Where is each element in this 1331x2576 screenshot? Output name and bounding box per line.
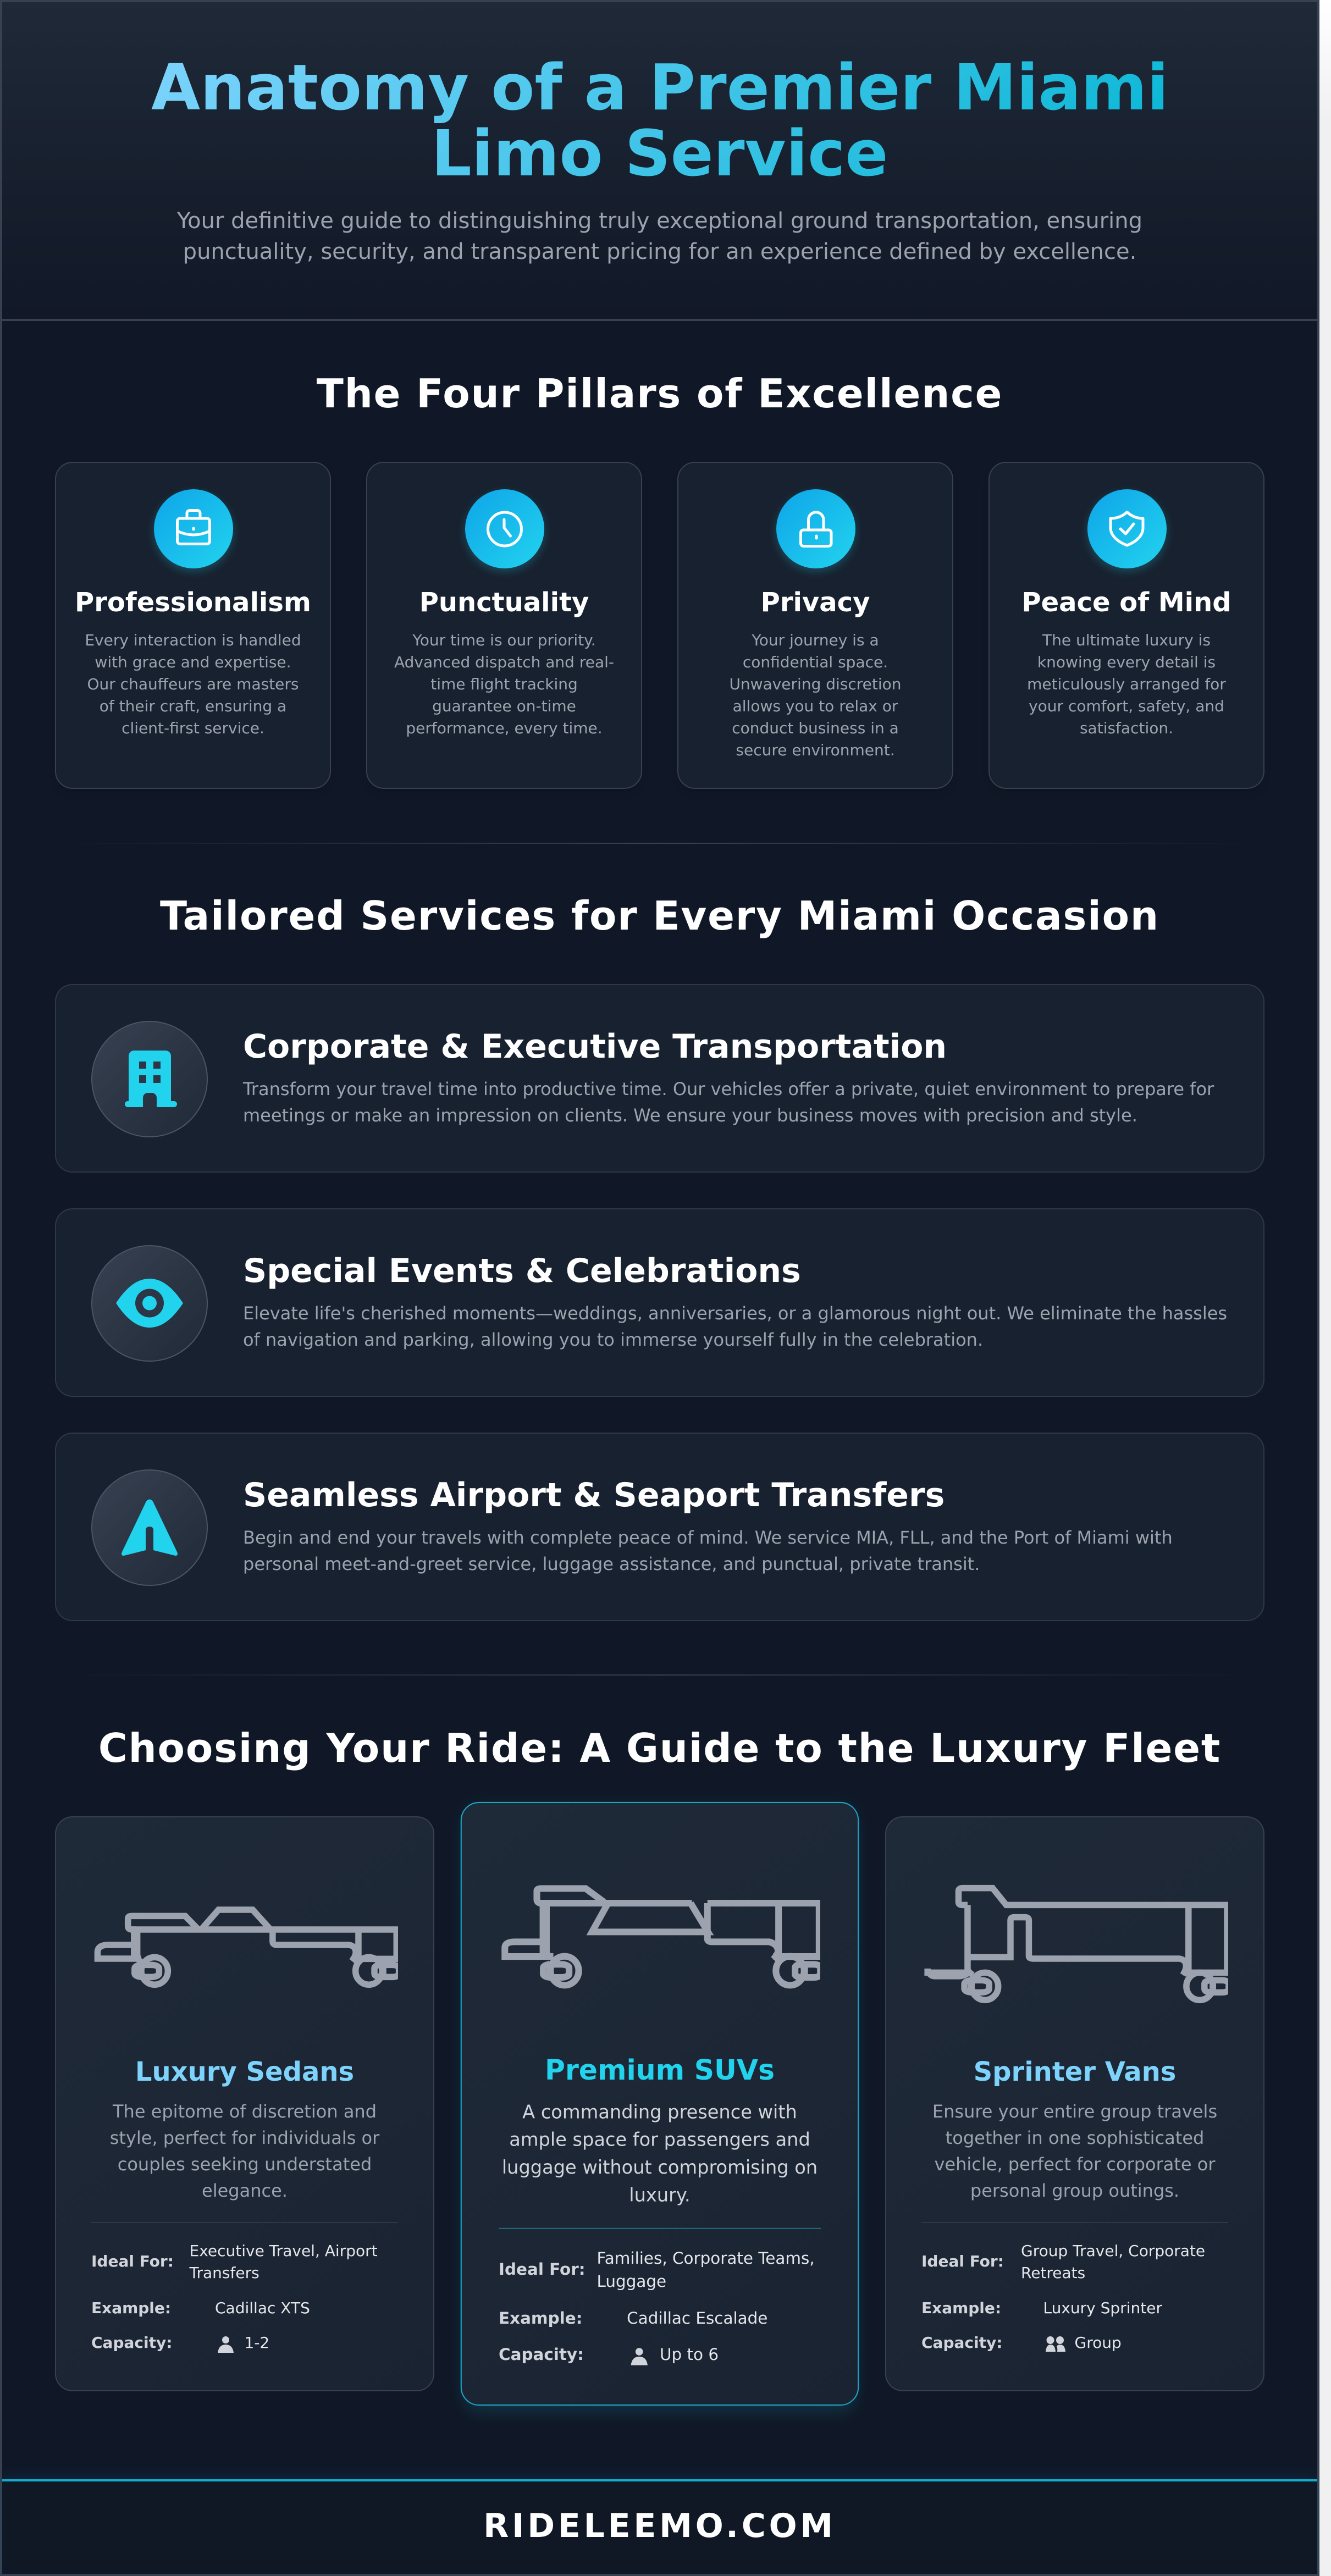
pillar title: Privacy (761, 587, 870, 618)
icon: briefcase (154, 489, 233, 568)
fleet text: luxury. (629, 2184, 691, 2206)
brand website: RIDELEEMO.COM (483, 2507, 836, 2545)
spec value: capacity: 1-2 (244, 2333, 269, 2352)
service title: Seamless Airport & Seaport Transfers (243, 1476, 945, 1514)
header (2, 2, 1317, 321)
spec label: capacity: Capacity: (499, 2345, 584, 2364)
pillar text: Your time is our priority. (412, 631, 596, 649)
panel: professionalism (55, 462, 331, 789)
icon: clock (465, 489, 544, 568)
panel: premium SUVs (461, 1802, 859, 2406)
subtitle: Your definitive guide to distinguishing truly exceptional ground transportation, ensuring (177, 208, 1142, 234)
pillar text (1027, 631, 1226, 737)
pillar text: Unwavering discretion (729, 675, 902, 693)
icon: person (218, 2336, 234, 2353)
pillar text: guarantee on-time (432, 697, 576, 715)
icon: group of people (1046, 2336, 1065, 2352)
pillar title: Peace of Mind (1021, 587, 1231, 618)
fleet text: vehicle, perfect for corporate or (934, 2154, 1216, 2175)
spec label: ideal for: Ideal For: (921, 2252, 1004, 2270)
fleet text: together in one sophisticated (946, 2127, 1204, 2148)
service text: personal meet-and-greet service, luggage assistance, and punctual, private transit. (243, 1554, 980, 1574)
service title: Corporate & Executive Transportation (243, 1027, 947, 1066)
pillar text: conduct business in a (732, 719, 899, 737)
pillar text: time flight tracking (430, 675, 578, 693)
fleet title: Luxury Sedans (135, 2057, 354, 2087)
icon: eye (91, 1245, 208, 1361)
spec value: ideal for: Retreats (1021, 2264, 1085, 2282)
fleet title: Premium SUVs (545, 2054, 775, 2086)
icon: navigation arrow (91, 1469, 208, 1585)
pillar text (85, 631, 301, 737)
panel: corporate service (55, 984, 1264, 1173)
service title: Special Events & Celebrations (243, 1252, 801, 1290)
pillar text: allows you to relax or (733, 697, 898, 715)
pillar text (394, 631, 614, 737)
pillar text: confidential space. (743, 653, 888, 671)
pillar text (729, 631, 902, 759)
spec label: capacity: Capacity: (91, 2333, 172, 2352)
service text: meetings or make an impression on clients. We ensure your business moves with precision and style. (243, 1105, 1137, 1126)
pillar text: of their craft, ensuring a (100, 697, 286, 715)
spec value: capacity: Up to 6 (660, 2345, 719, 2364)
pillar title: Professionalism (75, 587, 311, 618)
pillar text: Your journey is a (752, 631, 879, 649)
spec label: ideal for: Ideal For: (499, 2259, 585, 2279)
footer (2, 2479, 1317, 2574)
service text: of navigation and parking, allowing you to immerse yourself fully in the celebration. (243, 1329, 983, 1350)
heading: four pillars: The Four Pillars of Excellence (317, 371, 1003, 417)
pillar text: meticulously arranged for (1027, 675, 1226, 693)
fleet text: luggage without compromising on (502, 2156, 818, 2178)
pillar text: Every interaction is handled (85, 631, 301, 649)
spec value: ideal for (189, 2242, 378, 2282)
vehicle: sedan outline (95, 1906, 398, 1988)
fleet text: couples seeking understated (118, 2154, 372, 2175)
fleet text (110, 2101, 379, 2201)
spec value: example: Luxury Sprinter (1043, 2299, 1162, 2317)
panel: airport service (55, 1433, 1264, 1621)
heading: fleet: Choosing Your Ride: A Guide to the Luxury Fleet (98, 1725, 1221, 1771)
fleet text: A commanding presence with (522, 2101, 797, 2123)
service text: Elevate life's cherished moments—weddings, anniversaries, or a glamorous night out. We eliminate the hassles (243, 1303, 1227, 1324)
panel: special events service (55, 1208, 1264, 1397)
spec label: ideal for: Ideal For: (91, 2252, 174, 2270)
fleet text: style, perfect for individuals or (110, 2127, 379, 2148)
panel: privacy (677, 462, 953, 789)
fleet text (502, 2101, 818, 2206)
icon: person (631, 2348, 648, 2365)
spec value: example: Cadillac XTS (215, 2299, 310, 2317)
pillar text: The ultimate luxury is (1042, 631, 1211, 649)
title: Limo Service (431, 117, 888, 191)
spec label: example: Example: (91, 2299, 171, 2317)
icon: padlock (776, 489, 855, 568)
spec label: example: Example: (921, 2299, 1001, 2317)
spec value: capacity: Group (1074, 2333, 1122, 2352)
pillar text: satisfaction. (1080, 719, 1173, 737)
pillar title: Punctuality (419, 587, 589, 618)
fleet text: Ensure your entire group travels (932, 2101, 1217, 2122)
fleet text: elegance. (202, 2180, 288, 2201)
fleet text: ample space for passengers and (509, 2129, 810, 2151)
subtitle: punctuality, security, and transparent pricing for an experience defined by excellence. (183, 239, 1136, 264)
spec value: ideal for: Families, Corporate Teams, (597, 2248, 815, 2268)
service text (243, 1527, 1173, 1574)
panel: luxury sedans (55, 1816, 434, 2391)
spec value: ideal for: Luggage (597, 2272, 666, 2291)
panel: punctuality (366, 462, 642, 789)
pillar text: secure environment. (736, 741, 895, 759)
spec value: ideal for (597, 2247, 815, 2293)
pillar text: with grace and expertise. (95, 653, 291, 671)
fleet text: The epitome of discretion and (113, 2101, 377, 2122)
icon: building (91, 1020, 208, 1137)
fleet text: personal group outings. (970, 2180, 1179, 2201)
fleet text (886, 2098, 1263, 2204)
vehicle: SUV outline (501, 1885, 820, 1989)
title: Anatomy of a Premier Miami (151, 51, 1169, 125)
pillar text: Advanced dispatch and real- (394, 653, 614, 671)
pillar text: knowing every detail is (1037, 653, 1216, 671)
service text (243, 1303, 1227, 1350)
subtitle (177, 208, 1142, 264)
service text: Transform your travel time into productive time. Our vehicles offer a private, quiet environment to prepare for (243, 1079, 1214, 1099)
spec value: ideal for: Executive Travel, Airport (189, 2242, 378, 2259)
panel: peace of mind (988, 462, 1264, 789)
title (151, 55, 1168, 187)
service text: Begin and end your travels with complete peace of mind. We service MIA, FLL, and the Port of Miami with (243, 1527, 1173, 1548)
spec value: ideal for (1021, 2240, 1205, 2285)
pillar text: client-first service. (121, 719, 264, 737)
fleet title: Sprinter Vans (974, 2057, 1176, 2087)
spec value: example: Cadillac Escalade (627, 2308, 767, 2328)
pillar text: performance, every time. (406, 719, 603, 737)
heading: services: Tailored Services for Every Miami Occasion (160, 893, 1159, 939)
panel: sprinter vans (885, 1816, 1264, 2391)
spec label: example: Example: (499, 2308, 582, 2328)
spec label: capacity: Capacity: (921, 2333, 1002, 2352)
pillar text: your comfort, safety, and (1029, 697, 1224, 715)
spec value: ideal for: Transfers (189, 2264, 259, 2282)
spec value: ideal for: Group Travel, Corporate (1021, 2242, 1205, 2259)
icon: shield check (1087, 489, 1167, 568)
service text (243, 1079, 1214, 1126)
vehicle: van outline (880, 1803, 1228, 2023)
pillar text: Our chauffeurs are masters (87, 675, 299, 693)
